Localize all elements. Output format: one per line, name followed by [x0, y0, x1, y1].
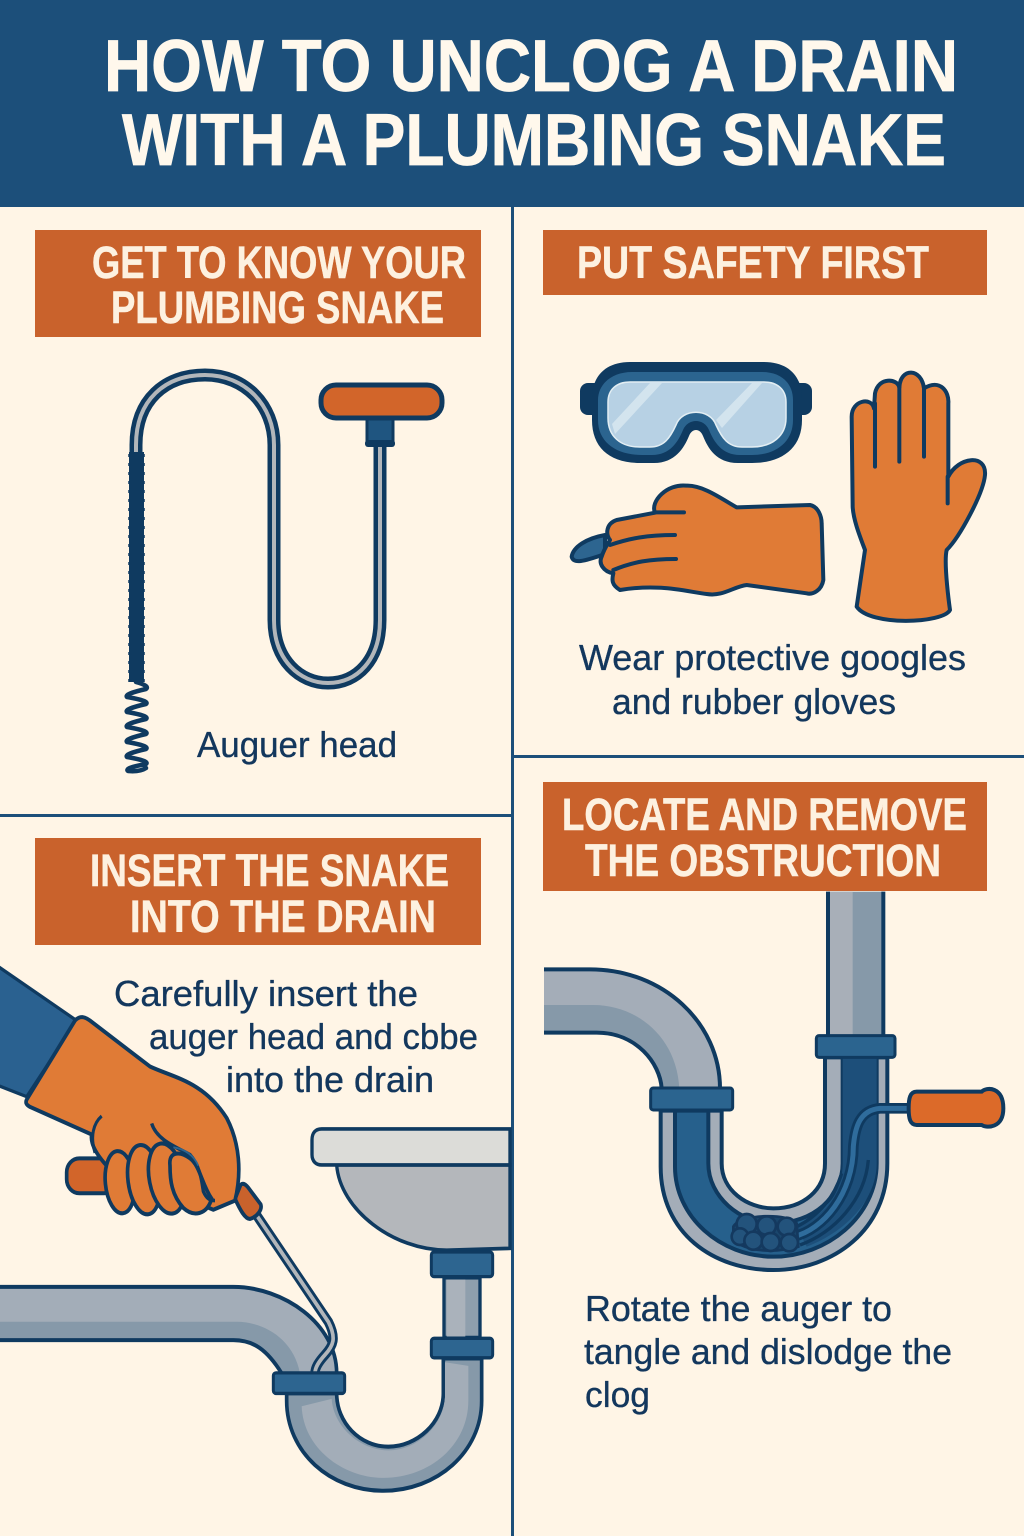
illustration: gloved hand gripping snake [0, 967, 261, 1219]
caption: rotate the auger: clog [585, 1374, 650, 1415]
caption: rotate the auger: tangle and dislodge the [584, 1331, 952, 1372]
handle [67, 1158, 261, 1219]
icon: glove lying flat [572, 485, 823, 594]
panel: insert the snake into the drain [0, 838, 510, 1491]
heading: insert the snake into the drain: INTO THE DRAIN [130, 891, 436, 942]
illustration: pipe and sink [0, 1129, 510, 1491]
snake cable into drain [257, 1215, 333, 1373]
heading: insert the snake into the drain [35, 838, 481, 945]
icon: plumbing snake tool [127, 375, 442, 771]
caption: rotate the auger [584, 1288, 952, 1415]
vertical pipe [828, 892, 883, 1036]
heading: locate and remove the obstruction [543, 782, 987, 891]
caption: rotate the auger: Rotate the auger to [585, 1288, 892, 1329]
icon: safety goggles [580, 362, 812, 463]
caption: carefully insert: Carefully insert the [114, 973, 418, 1014]
panel: get to know your plumbing snake [35, 230, 481, 771]
icon: upright glove [852, 373, 985, 621]
snake cable [793, 1108, 910, 1245]
clog [732, 1214, 798, 1251]
caption: wear protective goggles: Wear protective googles [579, 637, 966, 678]
caption: carefully insert: into the drain [226, 1059, 434, 1100]
caption: auguer head: Auguer head [197, 724, 397, 765]
trap cutaway [661, 1057, 887, 1270]
sink [312, 1129, 510, 1250]
heading: put safety first: PUT SAFETY FIRST [577, 237, 929, 288]
sleeve [0, 967, 77, 1097]
panel: put safety first [543, 230, 987, 722]
flanges [651, 1036, 895, 1110]
heading: get to know your plumbing snake: PLUMBING SNAKE [111, 282, 444, 333]
glove [26, 1017, 239, 1217]
caption: carefully insert: auger head and cbbe [149, 1016, 478, 1057]
heading: insert the snake into the drain: INSERT THE SNAKE [90, 845, 449, 896]
panel: locate and remove the obstruction [543, 782, 1003, 1415]
drain pipe [0, 1252, 493, 1491]
snake handle [909, 1089, 1003, 1127]
caption: carefully insert [114, 973, 478, 1100]
illustration: p-trap with snake and clog [544, 892, 1003, 1270]
upper horizontal pipe [544, 969, 720, 1088]
heading: get to know your plumbing snake: GET TO KNOW YOUR [92, 237, 466, 288]
header banner with title [0, 0, 1024, 207]
caption: wear protective goggles: and rubber gloves [612, 681, 896, 722]
heading: locate and remove the obstruction: THE OBSTRUCTION [585, 835, 941, 886]
caption: wear protective goggles [579, 637, 966, 722]
heading: get to know your plumbing snake [35, 230, 481, 337]
